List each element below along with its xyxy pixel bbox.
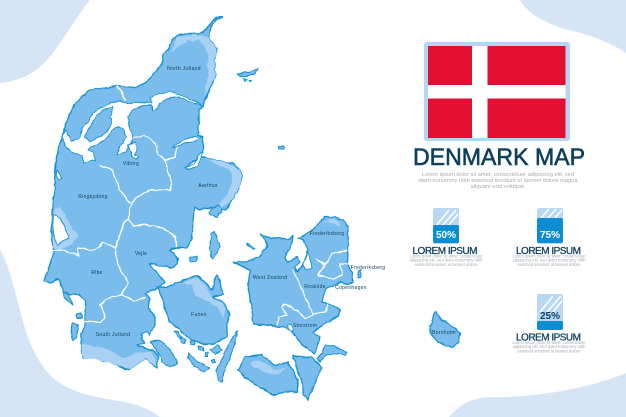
region labels: Vejle [135, 251, 147, 257]
region labels: Bornholm [432, 330, 456, 336]
water: fjords [53, 91, 203, 245]
island: Bornholm [430, 312, 460, 347]
region labels: Frederiksborg [310, 231, 344, 237]
flag of Denmark [424, 42, 570, 141]
stat: 50%: adipiscing elit, sed diam nonummy nibh [410, 258, 483, 262]
land masses [44, 17, 460, 400]
stat: 75%: 75% [540, 230, 560, 241]
region labels: Copenhagen [335, 285, 367, 291]
lighter coastal shading [53, 34, 242, 369]
stat: 25%: adipiscing elit, sed diam nonummy nibh [512, 344, 586, 349]
intro text: Lorem ipsum dolor sit amet, consectetuer adipiscing elit, sed [422, 172, 574, 178]
stat: 75%: LOREM IPSUM [516, 246, 581, 257]
stat: 25%: euismod tincidunt ut laoreet dolore [518, 348, 581, 354]
intro text [418, 172, 578, 190]
map of Denmark [44, 17, 460, 400]
stat: 25%: Lorem ipsum dolor sit amet, consectetuer [512, 340, 586, 345]
stat: 25% [512, 294, 586, 354]
region labels: Storstrom [293, 323, 317, 329]
title: DENMARK MAP [413, 144, 585, 171]
stat: 50% [410, 208, 483, 267]
stat: 50%: LOREM IPSUM [412, 246, 478, 257]
internal region borders [53, 86, 177, 322]
region labels: West Zealand [253, 275, 287, 281]
island: Zealand [233, 217, 353, 354]
region labels: South Jutland [96, 332, 130, 338]
island: Mors [85, 107, 113, 142]
stat: 25%: LOREM IPSUM [516, 332, 581, 344]
region labels: Ribe [91, 270, 103, 276]
region: Jutland [44, 17, 242, 369]
region labels: Aarthus [198, 183, 218, 189]
stat: 25%: 25% [540, 311, 560, 322]
small island east of Copenhagen [358, 270, 361, 278]
stat: 50%: euismod tincidunt ut laoreet dolore [414, 262, 478, 267]
region labels: Funen [191, 312, 207, 318]
region labels: Ringkjobing [78, 194, 108, 200]
region labels: Viborg [123, 161, 139, 167]
stat: 50%: 50% [436, 230, 456, 241]
region labels [78, 66, 456, 338]
Zealand region borders [278, 250, 348, 324]
region labels: Frederiksberg [351, 265, 385, 271]
stat: 75%: adipiscing elit, sed diam nonummy nibh [512, 258, 586, 262]
intro text: diam nonummy nibh euismod tincidunt ut laoreet dolore magna [418, 178, 578, 184]
stat: 75%: euismod tincidunt ut laoreet dolore [518, 262, 581, 267]
region labels: Roskilde [304, 284, 326, 290]
islands: Lolland, Falster, Mon [238, 345, 347, 400]
stat: 75% [512, 208, 586, 267]
small islands [63, 69, 284, 382]
island: Funen [157, 275, 230, 344]
stat: 75%: Lorem ipsum dolor sit amet, consectetuer [512, 254, 586, 258]
intro text: aliquam erat volutpat. [470, 184, 526, 190]
region labels: North Jutland [167, 66, 201, 72]
stat: 50%: Lorem ipsum dolor sit amet, consectetuer [410, 254, 483, 258]
